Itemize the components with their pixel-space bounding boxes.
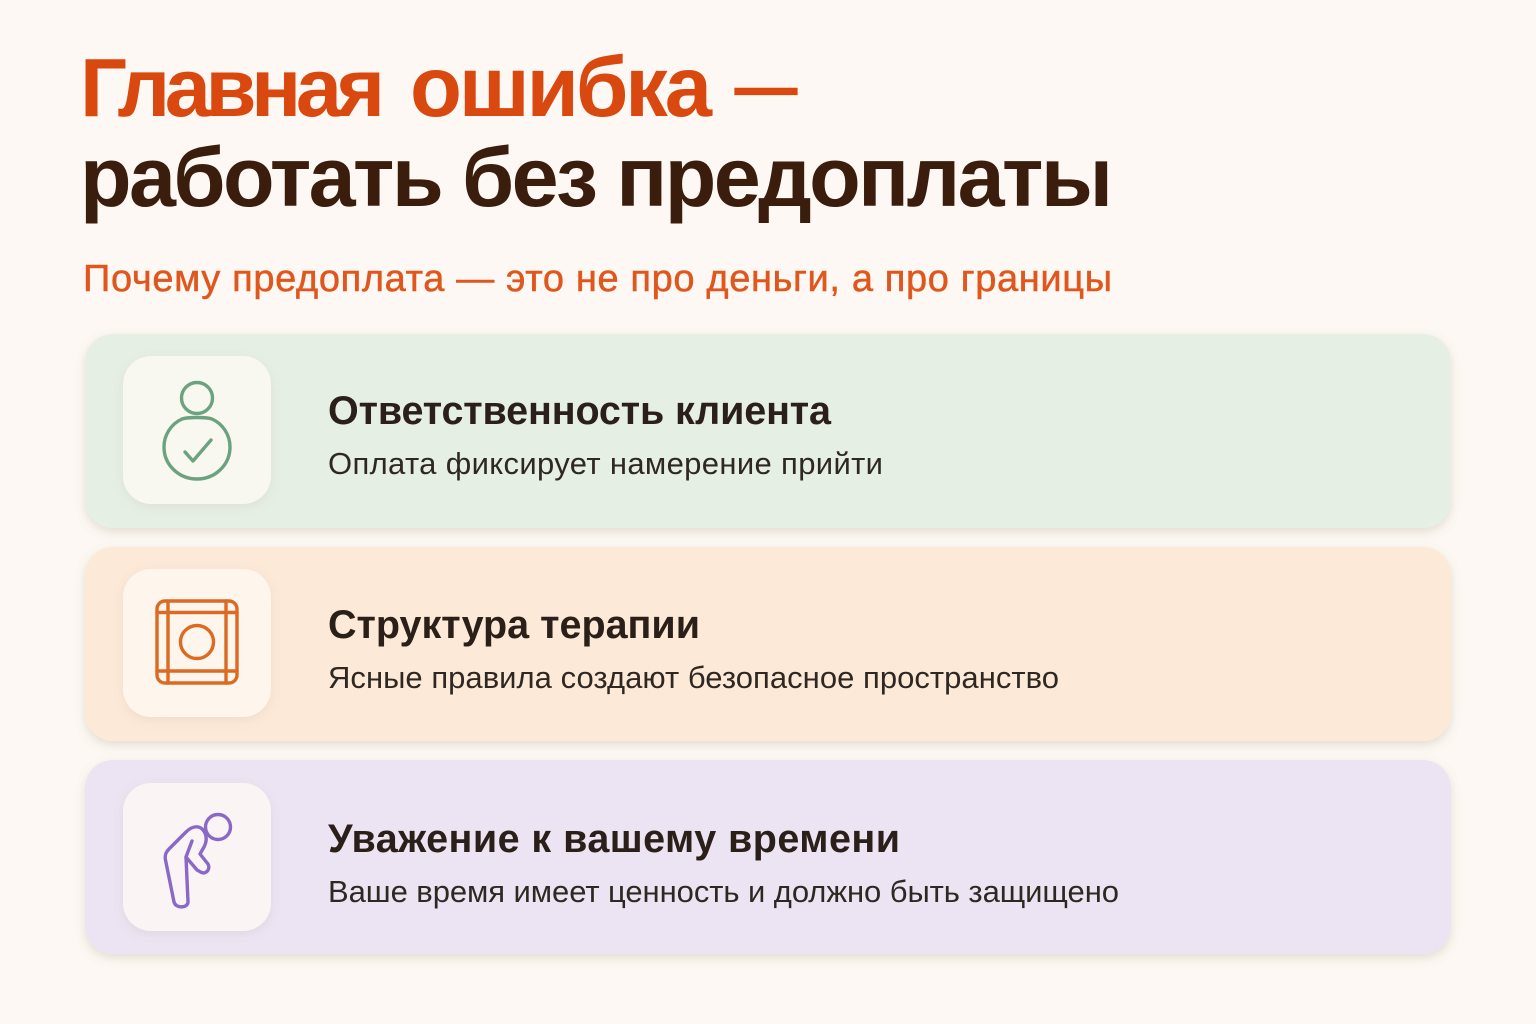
heading: Уважение к вашему времени [328, 817, 900, 861]
description: Ваше время имеет ценность и должно быть защищено [328, 874, 1119, 909]
heading: Ответственность клиента [328, 389, 832, 433]
panel: client responsibility [85, 334, 1451, 528]
title: — [735, 53, 797, 122]
title: работать без предоплаты [80, 130, 1113, 224]
icon: bowing figure [123, 783, 271, 931]
subtitle: Почему предоплата — это не про деньги, а про границы [83, 258, 1112, 300]
heading: Структура терапии [328, 603, 700, 647]
description: Ясные правила создают безопасное пространство [328, 660, 1059, 695]
icon: person with check mark [123, 356, 271, 504]
title: Главная [80, 41, 385, 134]
panel: therapy structure [85, 547, 1451, 741]
panel: respect for your time [85, 760, 1451, 954]
description: Оплата фиксирует намерение прийти [328, 446, 883, 481]
icon: framed square with circle [123, 569, 271, 717]
title: ошибка [410, 40, 713, 135]
title [80, 40, 1113, 224]
